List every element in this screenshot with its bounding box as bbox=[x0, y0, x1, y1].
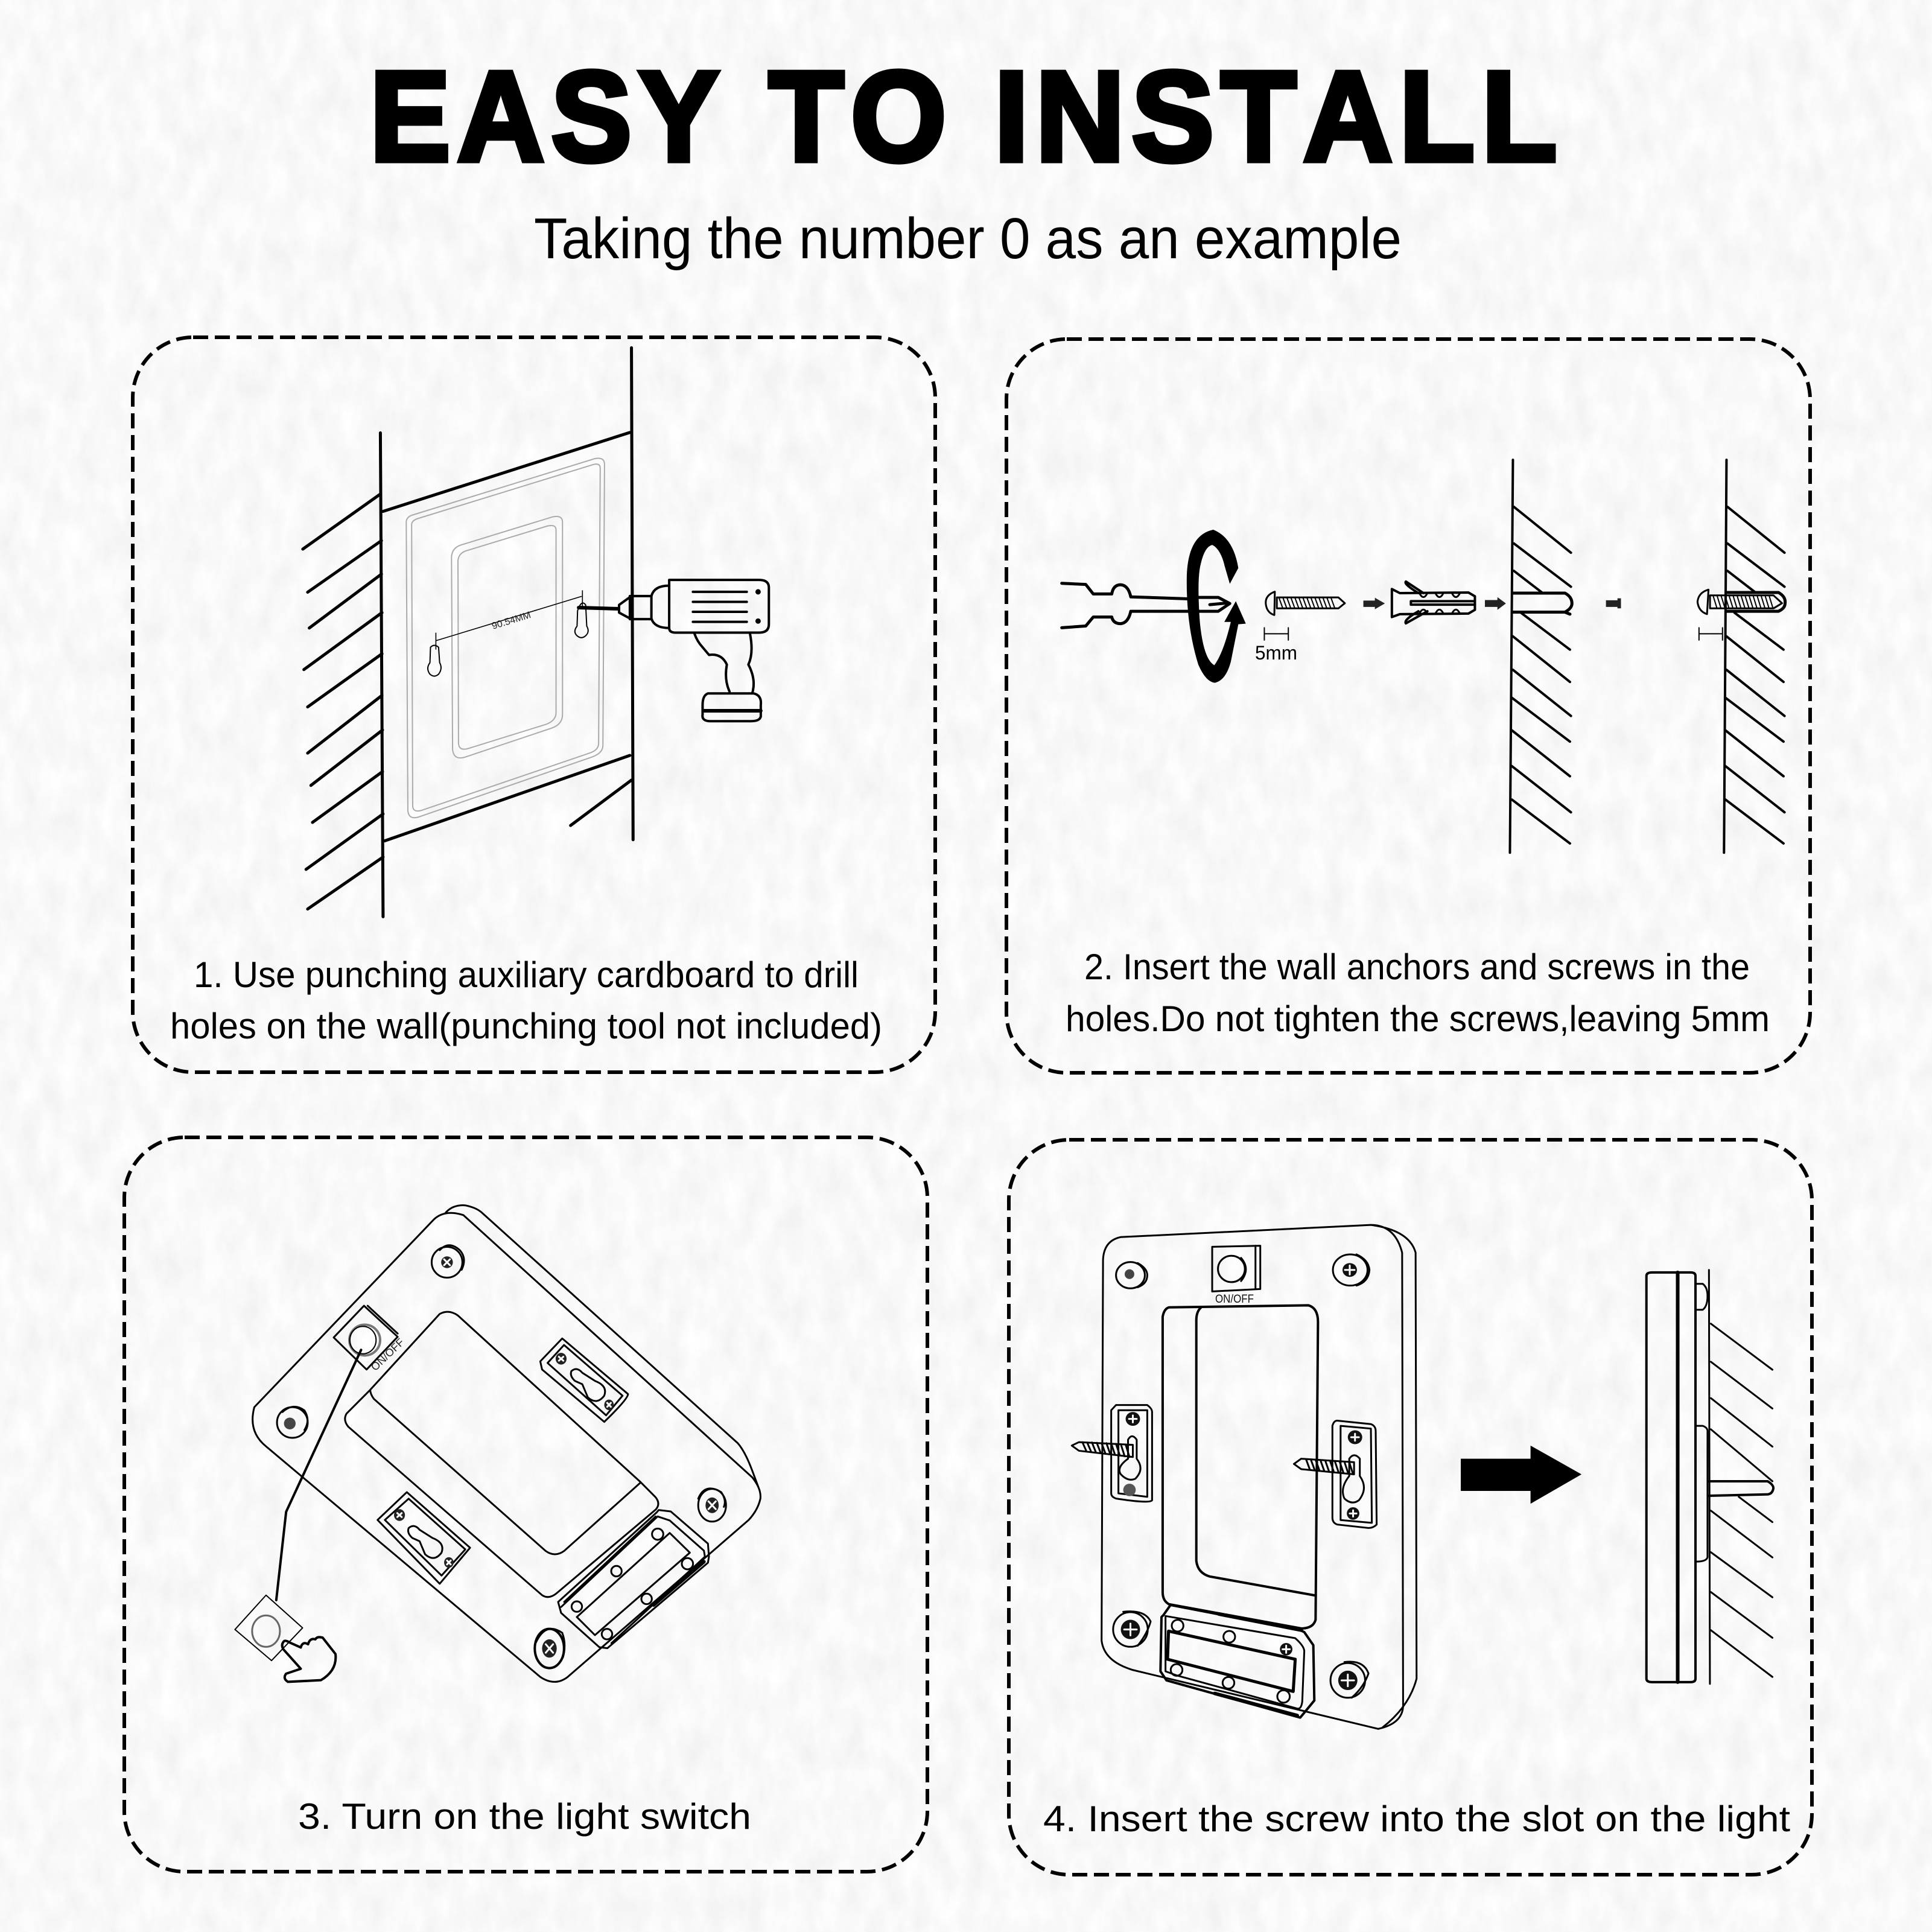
installed screw bbox=[1697, 589, 1785, 614]
big arrow bbox=[1461, 1446, 1581, 1504]
title: INSTALL bbox=[994, 45, 1564, 188]
illustration: wall and cardboard template bbox=[303, 348, 769, 917]
keyhole bracket right bbox=[1332, 1420, 1377, 1528]
arrow bbox=[1485, 597, 1506, 610]
wall side view bbox=[1709, 1270, 1773, 1684]
caption 2: holes.Do not tighten the screws,leaving 5mm bbox=[1066, 999, 1770, 1039]
leader line bbox=[276, 1350, 361, 1600]
screw bbox=[1266, 592, 1345, 615]
panel: step 2 bbox=[1006, 339, 1810, 1073]
on/off button bbox=[1212, 1246, 1260, 1291]
window recess bbox=[345, 1312, 658, 1597]
wall with hole bbox=[1510, 460, 1571, 853]
on/off button bbox=[334, 1306, 398, 1370]
corner screws bbox=[1113, 1254, 1370, 1698]
caption 1: holes on the wall(punching tool not included) bbox=[170, 1006, 882, 1046]
wall lines bbox=[380, 348, 633, 917]
measure line bbox=[436, 591, 582, 649]
caption 2: 2. Insert the wall anchors and screws in the bbox=[1084, 947, 1750, 987]
dimension label: 90.54MM bbox=[491, 610, 532, 632]
cardboard template outline bbox=[406, 458, 605, 818]
title: TO bbox=[769, 45, 953, 188]
caption 4: 4. Insert the screw into the slot on the light bbox=[1043, 1799, 1790, 1839]
title: EASY bbox=[370, 45, 726, 188]
screw left bbox=[1072, 1442, 1133, 1457]
side view of light bbox=[1647, 1273, 1708, 1682]
screw right bbox=[1294, 1459, 1354, 1474]
caption 3: 3. Turn on the light switch bbox=[298, 1796, 751, 1837]
illustration: light back rotated bbox=[235, 1206, 760, 1682]
5mm dimension marks bbox=[1264, 628, 1723, 640]
drilled hole bbox=[1513, 593, 1572, 614]
caption 1: 1. Use punching auxiliary cardboard to drill bbox=[194, 955, 859, 995]
rotation arrow bbox=[1187, 530, 1246, 683]
keyhole bracket lower bbox=[378, 1492, 470, 1584]
enlarged button bbox=[235, 1595, 303, 1660]
caption 2 bbox=[1066, 947, 1770, 1039]
screw side view bbox=[1709, 1481, 1773, 1496]
corner screws bbox=[277, 1245, 726, 1668]
battery latch bbox=[558, 1510, 709, 1648]
arrow stub bbox=[1606, 599, 1621, 608]
panel: step 3 bbox=[124, 1137, 927, 1872]
drill bbox=[579, 580, 769, 721]
on/off label: ON/OFF bbox=[1215, 1293, 1254, 1306]
keyhole marks bbox=[428, 603, 588, 676]
panel: step 1 bbox=[133, 337, 935, 1072]
wall hatching bbox=[303, 494, 632, 909]
window recess bbox=[1163, 1305, 1318, 1629]
keyhole bracket upper bbox=[540, 1338, 628, 1422]
wall with screw installed bbox=[1724, 460, 1785, 853]
5mm label: 5mm bbox=[1255, 642, 1297, 664]
illustration: light back upright bbox=[1072, 1225, 1773, 1729]
illustration: screwdriver, screw, anchor and wall bbox=[1062, 460, 1785, 853]
subtitle: Taking the number 0 as an example bbox=[534, 206, 1402, 271]
battery latch bbox=[1160, 1605, 1314, 1718]
arrow bbox=[1364, 598, 1385, 609]
on/off label: ON/OFF bbox=[369, 1336, 407, 1373]
title bbox=[370, 45, 1564, 188]
panel: step 4 bbox=[1009, 1140, 1812, 1875]
housing outline bbox=[253, 1206, 760, 1682]
anchor bumps bbox=[1419, 593, 1460, 614]
icon: pressing hand bbox=[282, 1637, 335, 1682]
caption 1 bbox=[170, 955, 882, 1046]
wall anchor bbox=[1392, 582, 1475, 623]
screwdriver bbox=[1062, 583, 1230, 628]
keyhole bracket left bbox=[1111, 1405, 1152, 1502]
housing outline bbox=[1102, 1225, 1417, 1729]
